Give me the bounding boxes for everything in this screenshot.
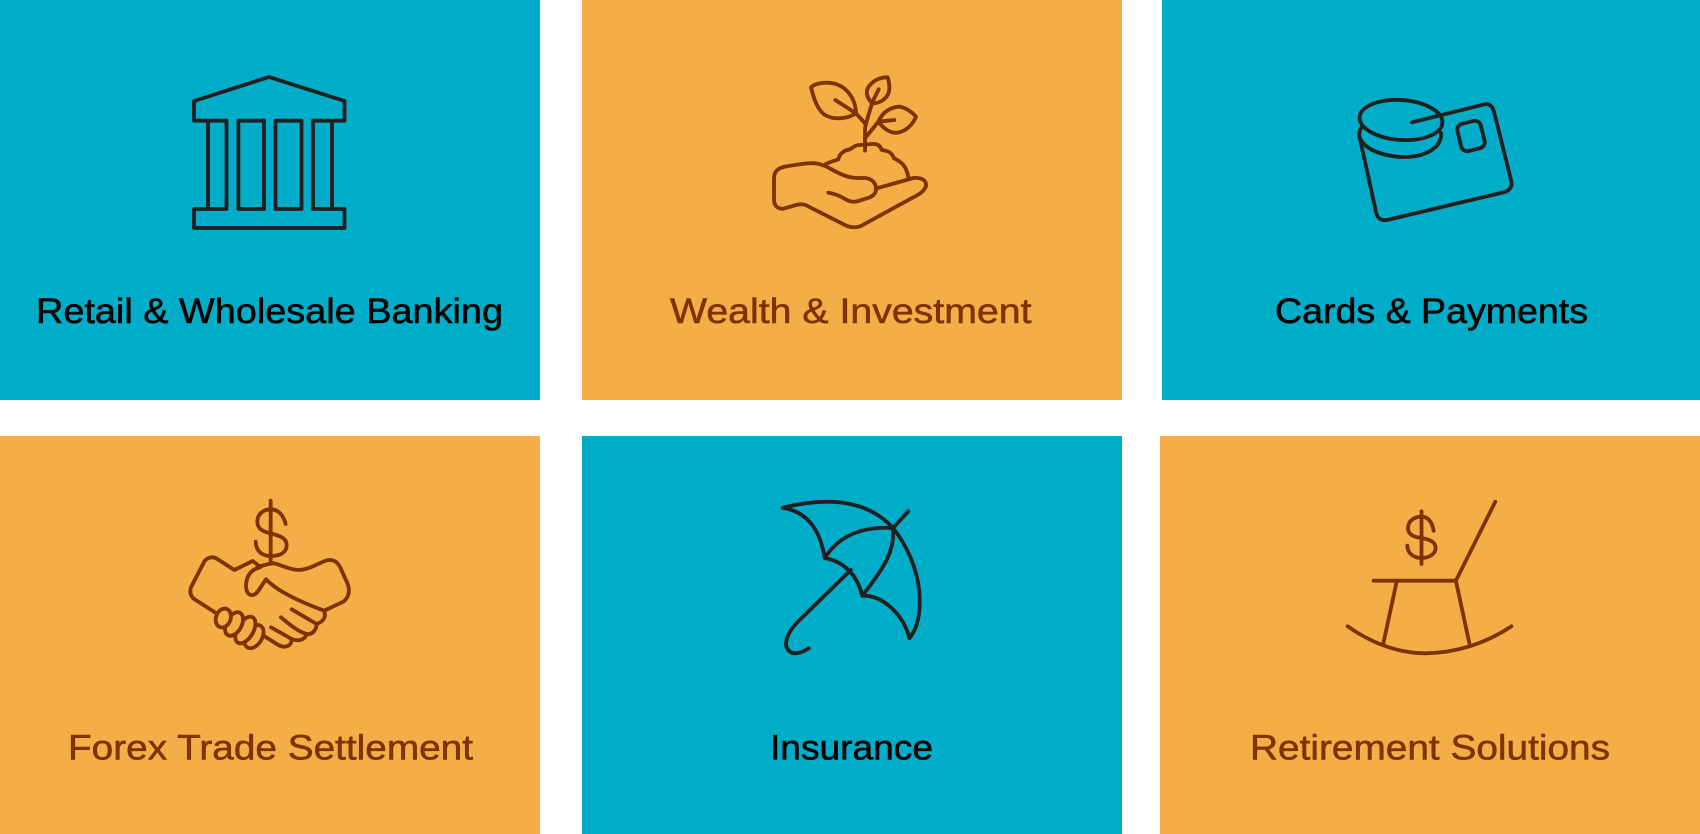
panel: wealth and investment (582, 0, 1122, 400)
panel: retirement solutions (1160, 436, 1700, 834)
icon: umbrella (783, 502, 920, 653)
panel: forex trade settlement (0, 436, 540, 834)
label: wealth and investment: Wealth & Investment (670, 291, 1032, 331)
label: cards and payments: Cards & Payments (1275, 291, 1588, 331)
label: forex trade settlement: Forex Trade Settlement (68, 728, 473, 768)
label: insurance: Insurance (770, 728, 933, 768)
icon: handshake with dollar (190, 501, 349, 652)
icon: rocking chair with dollar (1348, 502, 1511, 653)
panel: insurance (582, 436, 1122, 834)
panel: cards and payments (1162, 0, 1700, 400)
icon: bank building (194, 77, 344, 228)
icon: hand holding plant (774, 77, 926, 227)
label: retail and wholesale banking: Retail & Wholesale Banking (36, 291, 503, 331)
panel: retail and wholesale banking (0, 0, 540, 400)
label: retirement solutions: Retirement Solutions (1250, 728, 1610, 768)
icon: card and coins (1358, 97, 1512, 220)
